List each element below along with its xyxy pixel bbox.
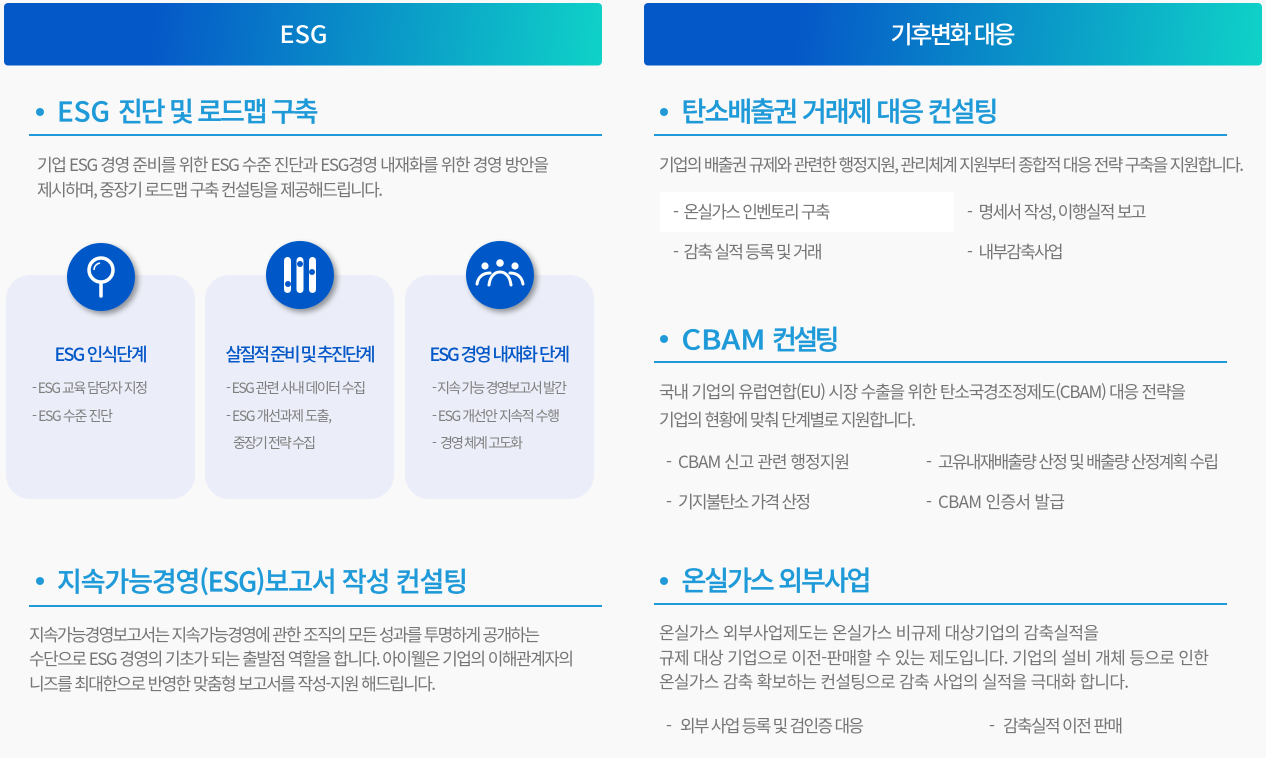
list: emissions trading services: 온실가스 인벤토리 구축 <box>684 198 830 223</box>
list: external project services <box>666 712 1123 737</box>
list: CBAM services <box>666 448 1219 513</box>
panel: substantive preparation stage <box>205 241 394 499</box>
card list: - <box>432 433 437 453</box>
list: external project services: - <box>666 712 672 737</box>
card list: - ESG 교육 담당자 지정 <box>32 378 148 398</box>
section: greenhouse gas external projects <box>654 560 1227 605</box>
text block: sustainability report description: 지속가능경영보고서는 지속가능경영에 관한 조직의 모든 성과를 투명하게 공개하는 <box>29 621 540 646</box>
section: CBAM consulting <box>654 318 1227 363</box>
section: ESG diagnosis and roadmap: ESG <box>57 90 110 130</box>
card list: - 지속 가능 경영보고서 발간 <box>432 378 567 398</box>
list: CBAM services: - <box>926 488 932 513</box>
section: greenhouse gas external projects: 온실가스 외부사업 <box>682 560 872 598</box>
icon: sliders <box>266 241 334 309</box>
right column header: climate response <box>644 3 1262 66</box>
list: emissions trading services: 명세서 작성, 이행실적 보고 <box>978 198 1146 223</box>
list: external project services: 감축실적 이전 판매 <box>1003 712 1123 737</box>
section: emissions trading consulting: 탄소배출권 거래제 대응 컨설팅 <box>682 90 998 130</box>
panel: ESG management internalization stage <box>405 241 594 499</box>
section: ESG diagnosis and roadmap <box>29 90 602 136</box>
icon: magnifier <box>67 243 135 311</box>
list: emissions trading services: 내부감축사업 <box>978 238 1064 263</box>
section: CBAM consulting: CBAM <box>682 318 766 358</box>
card list: - ESG 개선과제 도출, <box>226 406 332 426</box>
text block: ESG diagnosis description: 기업 ESG 경영 준비를 위한 ESG 수준 진단과 ESG경영 내재화를 위한 경영 방안을 <box>37 151 549 176</box>
text block: CBAM description <box>659 378 1186 431</box>
list: emissions trading services: - <box>967 238 973 263</box>
right column header: climate response: 기후변화 대응 <box>890 15 1016 50</box>
text block: CBAM description: 국내 기업의 유럽연합(EU) 시장 수출을 위한 탄소국경조정제도(CBAM) 대응 전략을 <box>659 378 1186 403</box>
text block: external projects description: 규제 대상 기업으로 이전-판매할 수 있는 제도입니다. 기업의 설비 개체 등으로 인한 <box>659 644 1209 669</box>
text block: CBAM description: 기업의 현황에 맞춰 단계별로 지원합니다. <box>659 406 916 431</box>
list: external project services: 외부 사업 등록 및 검인증 대응 <box>680 712 864 737</box>
panel: ESG awareness stage <box>6 243 195 499</box>
list: emissions trading services: 감축 실적 등록 및 거래 <box>684 238 822 263</box>
card list: - ESG 개선안 지속적 수행 <box>432 406 560 426</box>
list: emissions trading services <box>660 192 1146 263</box>
section: sustainability report consulting <box>29 560 602 607</box>
card list: 중장기 전략 수집 <box>233 433 316 453</box>
section: emissions trading consulting <box>654 90 1227 136</box>
list: external project services: - <box>989 712 995 737</box>
card list <box>32 378 148 426</box>
left column header: ESG: ESG <box>280 15 328 50</box>
list: emissions trading services: - <box>967 198 973 223</box>
text block: external projects description: 온실가스 감축 확보하는 컨설팅으로 감축 사업의 실적을 극대화 합니다. <box>659 668 1129 693</box>
text block: sustainability report description: 니즈를 최대한으로 반영한 맞춤형 보고서를 작성-지원 해드립니다. <box>29 670 436 695</box>
text block: external projects description <box>659 619 1209 693</box>
list: CBAM services: 고유내재배출량 산정 및 배출량 산정계획 수립 <box>938 448 1219 473</box>
text block: emissions trading description: 기업의 배출권 규제와 관련한 행정지원, 관리체계 지원부터 종합적 대응 전략 구축을 지원합니다. <box>659 151 1244 176</box>
list: CBAM services: 기지불탄소 가격 산정 <box>678 488 811 513</box>
card heading: ESG 경영 내재화 단계 <box>430 341 570 367</box>
section: sustainability report consulting: 지속가능경영(ESG)보고서 작성 컨설팅 <box>57 560 468 600</box>
list: CBAM services: CBAM 인증서 발급 <box>938 488 1065 513</box>
text block: ESG diagnosis description: 제시하며, 중장기 로드맵 구축 컨설팅을 제공해드립니다. <box>37 176 383 201</box>
list: CBAM services: - <box>666 448 672 473</box>
left column header: ESG <box>4 3 602 66</box>
text block: external projects description: 온실가스 외부사업제도는 온실가스 비규제 대상기업의 감축실적을 <box>659 619 1099 644</box>
card list <box>226 378 366 453</box>
text block: sustainability report description <box>29 621 574 695</box>
list: CBAM services: CBAM 신고 관련 행정지원 <box>678 448 850 473</box>
list: CBAM services: - <box>666 488 672 513</box>
card heading: ESG 인식단계 <box>54 341 148 367</box>
section: ESG diagnosis and roadmap: 진단 및 로드맵 구축 <box>118 90 318 130</box>
card list <box>432 378 567 453</box>
list: CBAM services: - <box>926 448 932 473</box>
text block: ESG diagnosis description <box>37 151 549 201</box>
card list: 경영 체계 고도화 <box>440 433 523 453</box>
section: CBAM consulting: 컨설팅 <box>772 318 840 358</box>
list: emissions trading services: - <box>673 238 679 263</box>
text block: sustainability report description: 수단으로 ESG 경영의 기초가 되는 출발점 역할을 합니다. 아이웰은 기업의 이해관계자의 <box>29 645 574 670</box>
card list: - ESG 관련 사내 데이터 수집 <box>226 378 366 398</box>
icon: people <box>466 241 534 309</box>
list: emissions trading services: - <box>673 198 679 223</box>
card list: - ESG 수준 진단 <box>32 406 113 426</box>
card heading: 살질적 준비 및 추진단계 <box>226 341 376 367</box>
